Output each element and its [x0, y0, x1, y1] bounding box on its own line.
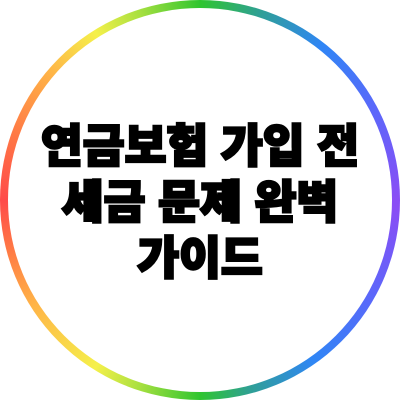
title: 연금보험 가입 전 [41, 121, 359, 172]
title: 세금 문제 완벽 [62, 177, 338, 228]
title: 가이드 [137, 233, 263, 284]
